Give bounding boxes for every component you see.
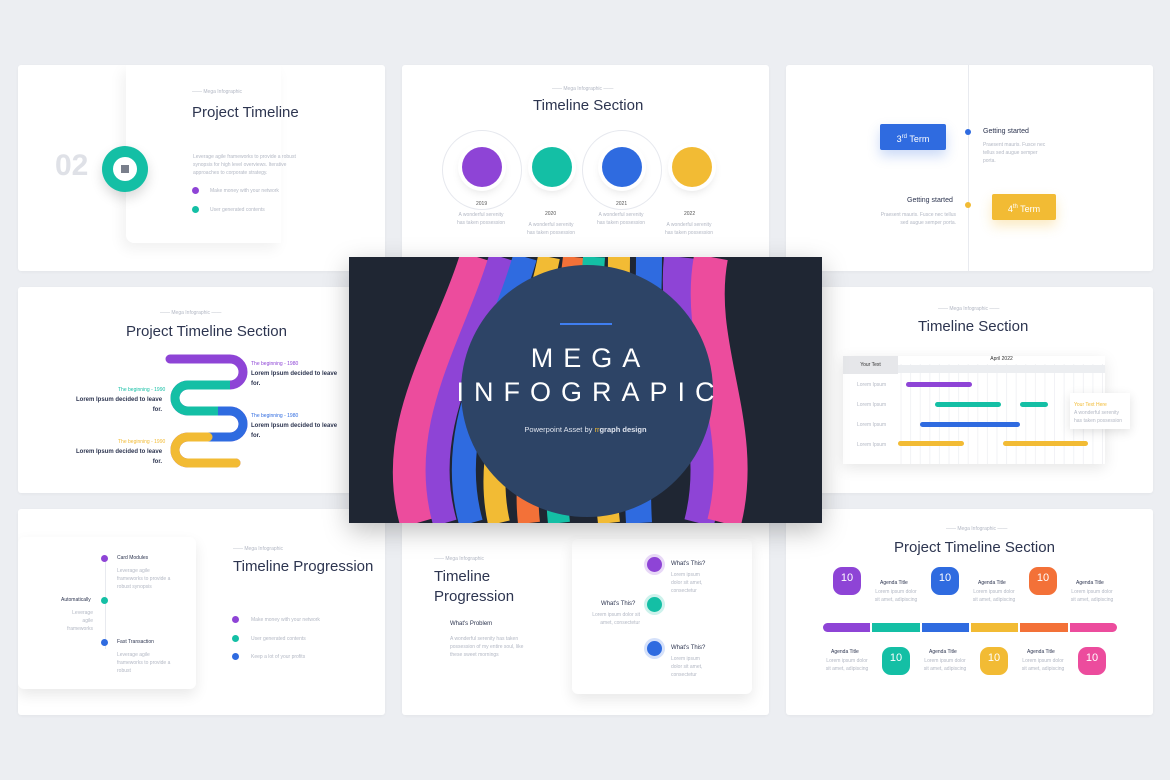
panel: timeline progression middle: A wonderful serenity has taken possession of my entire soul, like these sweet mornings [450, 636, 523, 658]
panel: agenda timeline: Agenda Title [929, 649, 957, 655]
panel: snake timeline: for. [251, 381, 260, 387]
gantt chart: April 2022 [990, 356, 1013, 362]
panel: timeline section circles: —— Mega Infographic —— [552, 86, 613, 92]
panel: agenda timeline: Agenda Title [1027, 649, 1055, 655]
panel: agenda timeline: 10 [1086, 652, 1098, 664]
heading: Progression [434, 588, 514, 605]
panel: snake timeline: —— Mega Infographic —— [160, 310, 221, 316]
panel: agenda timeline: Lorem ipsum dolor sit amet, adipiscing [1022, 658, 1064, 672]
panel: timeline progression left: Automatically [61, 597, 91, 603]
callout [1070, 393, 1130, 429]
panel: center hero [349, 257, 822, 523]
heading: Timeline Section [918, 318, 1028, 335]
panel: agenda timeline: Agenda Title [1076, 580, 1104, 586]
panel: timeline progression left: Leverage agile frameworks [67, 610, 93, 632]
panel: agenda timeline: 10 [988, 652, 1000, 664]
panel: timeline progression middle: What's This? [671, 645, 705, 651]
panel: timeline progression middle: Lorem ipsum dolor sit amet, consectetur [671, 572, 702, 594]
panel: agenda timeline: Lorem ipsum dolor sit amet, adipiscing [875, 589, 917, 603]
snake path [166, 354, 248, 468]
title: INFOGRAPIC [456, 377, 724, 407]
title [456, 343, 724, 407]
panel: timeline section circles [402, 65, 769, 271]
panel: timeline progression left: User generated contents [251, 636, 306, 642]
panel: snake timeline: for. [153, 407, 162, 413]
panel: timeline section circles: 2022 [684, 211, 695, 217]
panel: timeline section circles: 2020 [545, 211, 556, 217]
panel: agenda timeline: 10 [1037, 572, 1049, 584]
panel: gantt timeline: —— Mega Infographic —— [938, 306, 999, 312]
callout: 3rd term [880, 124, 946, 150]
panel: agenda timeline: Lorem ipsum dolor sit amet, adipiscing [1071, 589, 1113, 603]
panel: timeline progression left: Keep a lot of your profits [251, 654, 305, 660]
panel: snake timeline: Lorem Ipsum decided to leave [251, 371, 337, 377]
panel: agenda timeline: Agenda Title [978, 580, 1006, 586]
panel: terms [786, 65, 1153, 271]
panel: agenda timeline: Lorem ipsum dolor sit amet, adipiscing [826, 658, 868, 672]
wavy colored bands [392, 257, 748, 523]
panel: timeline section circles: A wonderful serenity has taken possession [457, 212, 505, 226]
panel: timeline progression left: Make money with your network [251, 617, 320, 623]
panel: timeline progression left: —— Mega Infographic [233, 546, 283, 552]
panel: timeline progression middle: Lorem ipsum dolor sit amet, consectetur [671, 656, 702, 678]
panel: snake timeline: Lorem Ipsum decided to leave [76, 397, 162, 403]
heading [434, 568, 514, 605]
heading: Timeline Section [533, 97, 643, 114]
panel: snake timeline: Lorem Ipsum decided to leave [76, 449, 162, 455]
badges: 10 [841, 572, 853, 584]
callout: 3rd term: 3rd Term [897, 134, 929, 144]
title: MEGA [531, 343, 650, 373]
heading: Timeline [434, 568, 490, 585]
panel: terms: Getting started [983, 128, 1029, 135]
decorative inner shape [126, 65, 281, 243]
heading: Project Timeline [192, 104, 299, 121]
panel: timeline section circles: A wonderful serenity has taken possession [665, 222, 713, 236]
gantt chart: Lorem Ipsum [857, 422, 886, 428]
panel: snake timeline: The beginning - 1980 [251, 361, 298, 367]
circles row [442, 130, 714, 210]
panel: snake timeline: The beginning - 1980 [251, 413, 298, 419]
panel: agenda timeline: Lorem ipsum dolor sit amet, adipiscing [924, 658, 966, 672]
panel: project timeline 02: —— Mega Infographic [192, 89, 242, 95]
panel: timeline progression left: Leverage agile frameworks to provide a robust synopsis [117, 568, 170, 590]
heading: Project Timeline Section [126, 323, 287, 340]
panel: snake timeline: The beginning - 1990 [118, 439, 165, 445]
panel: snake timeline: The beginning - 1990 [118, 387, 165, 393]
panel: timeline progression middle: What's This? [671, 561, 705, 567]
callout: 4th term: 4th Term [1008, 204, 1040, 214]
gantt chart: Lorem Ipsum [857, 442, 886, 448]
gantt chart: Lorem Ipsum [857, 382, 886, 388]
panel: timeline progression middle [402, 509, 769, 715]
gantt chart [843, 356, 1105, 464]
panel: timeline progression middle: What's Problem [450, 621, 492, 627]
gantt chart: Your Text [860, 362, 881, 368]
panel: project timeline 02: Make money with your network [210, 188, 279, 194]
heading: Project Timeline Section [894, 539, 1055, 556]
panel: terms: Praesent mauris. Fusce nec tellus sed augue semper porta. [881, 212, 956, 226]
callout: Your Text Here [1074, 402, 1107, 408]
text block: Leverage agile frameworks to provide a robust synopsis for high level overviews. Iterative approaches to corporate strategy. [193, 154, 296, 176]
panel: agenda timeline: Agenda Title [880, 580, 908, 586]
panel: gantt timeline [786, 287, 1153, 493]
panel: snake timeline: for. [251, 433, 260, 439]
panel: timeline section circles: A wonderful serenity has taken possession [527, 222, 575, 236]
panel: timeline section circles: A wonderful serenity has taken possession [597, 212, 645, 226]
panel: timeline progression left: Card Modules [117, 555, 148, 561]
icon: teal ring [102, 146, 148, 192]
panel: agenda timeline: 10 [939, 572, 951, 584]
bullets [192, 187, 199, 194]
panel: snake timeline: for. [153, 459, 162, 465]
panel: agenda timeline [786, 509, 1153, 715]
badges [833, 567, 861, 595]
panel: timeline section circles: 2021 [616, 201, 627, 207]
panel: timeline progression left [18, 509, 385, 715]
subtitle: Powerpoint Asset by rrgraph design [524, 425, 647, 434]
panel: terms: Getting started [907, 197, 953, 204]
panel: project timeline 02 [18, 65, 385, 271]
heading: Timeline Progression [233, 558, 373, 575]
panel: timeline progression middle: —— Mega Infographic [434, 556, 484, 562]
panel: timeline progression middle: What's This? [601, 601, 635, 607]
panel: project timeline 02: User generated contents [210, 207, 265, 213]
panel: agenda timeline: Lorem ipsum dolor sit amet, adipiscing [973, 589, 1015, 603]
panel: terms: Praesent mauris. Fusce nec tellus sed augue semper porta. [983, 142, 1045, 164]
year labels: 2019 [476, 201, 487, 207]
panel: agenda timeline: 10 [890, 652, 902, 664]
callout: 4th term [992, 194, 1056, 220]
colored bar [823, 623, 1117, 632]
panel: timeline progression middle: Lorem ipsum dolor sit amet, consectetur [592, 612, 640, 626]
callout: A wonderful serenity has taken possession [1074, 410, 1122, 424]
panel: snake timeline [18, 287, 385, 493]
panel: agenda timeline: Agenda Title [831, 649, 859, 655]
panel: timeline progression left: Leverage agile frameworks to provide a robust [117, 652, 170, 674]
gantt chart: Lorem Ipsum [857, 402, 886, 408]
panel: agenda timeline: —— Mega Infographic —— [946, 526, 1007, 532]
panel: snake timeline: Lorem Ipsum decided to leave [251, 423, 337, 429]
number 02: 02 [55, 149, 88, 182]
panel: timeline progression left: Fast Transaction [117, 639, 154, 645]
